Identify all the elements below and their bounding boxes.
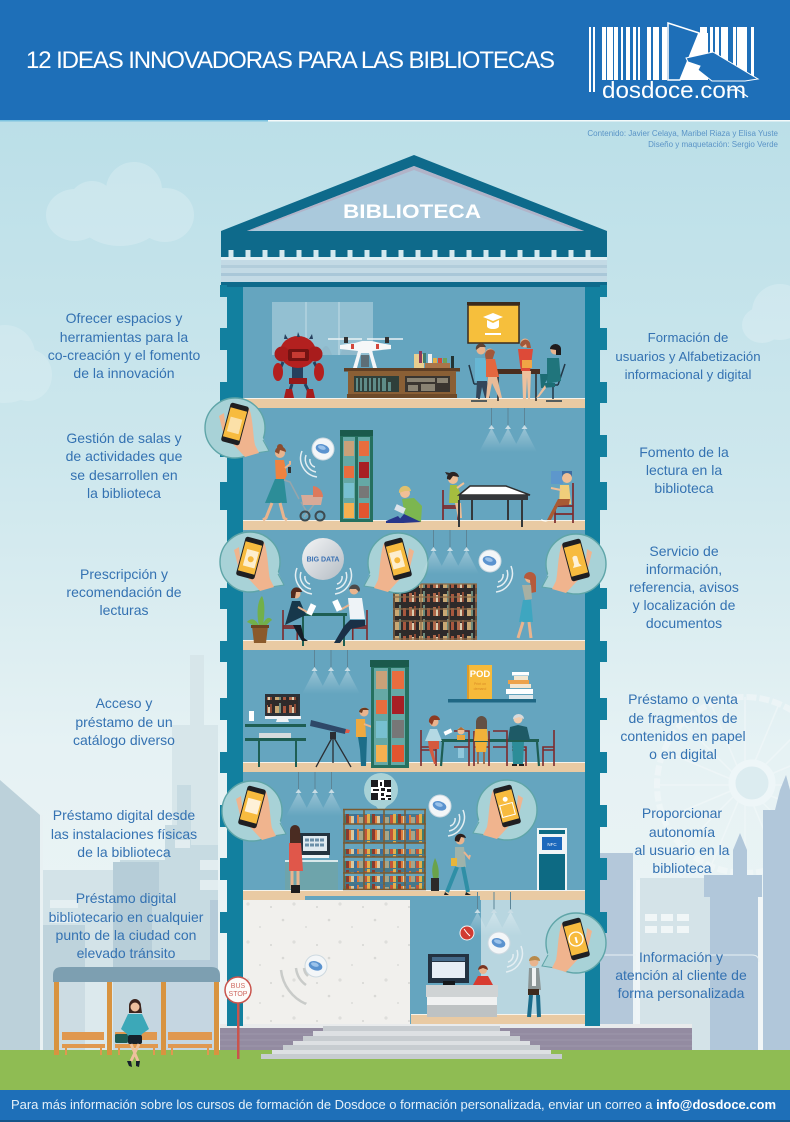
idea: room management: la biblioteca	[87, 485, 161, 501]
floor slabs	[243, 398, 585, 1024]
cloud: upper right	[742, 284, 790, 343]
title: 12 IDEAS INNOVADORAS PARA LAS BIBLIOTECAS	[26, 47, 555, 74]
floor 1: red robot	[273, 332, 324, 398]
floor 3: lamps	[421, 530, 479, 574]
idea: catalogue access: Acceso y	[96, 695, 152, 711]
idea: information service: Servicio de	[649, 543, 719, 559]
idea: fragment lending: de fragmentos de	[629, 710, 738, 726]
floor 4: POD book and stack: Print on	[474, 682, 486, 686]
floor 5: wifi beacon	[429, 795, 464, 836]
idea: personal attention: atención al cliente de	[615, 967, 747, 983]
floor 5: lamps	[286, 772, 344, 816]
bus stop sign: BUS	[231, 983, 246, 990]
ground floor white wall	[243, 900, 410, 1024]
credits	[587, 129, 779, 149]
benches	[62, 1032, 212, 1055]
floor 4: lamps	[302, 650, 360, 694]
credits: Contenido: Javier Celaya, Maribel Riaza y Elisa Yuste	[587, 129, 779, 138]
ground floor: reception desk	[426, 985, 498, 1017]
bus stop sign: STOP	[229, 991, 248, 998]
idea: user autonomy: biblioteca	[652, 860, 712, 876]
idea: information service: información,	[646, 561, 722, 577]
idea: personal attention: forma personalizada	[618, 985, 745, 1001]
floor 5: phone bubble map	[473, 780, 537, 840]
idea: reading recommendation: Prescripción y	[80, 566, 168, 582]
floor 4: computer station	[245, 694, 306, 767]
idea: room management: Gestión de salas y	[66, 430, 182, 446]
idea: catalogue access: préstamo de un	[75, 714, 173, 730]
floor 2: VR reader	[541, 471, 573, 523]
desk-top books	[414, 351, 454, 368]
bus shelter	[53, 967, 220, 1055]
floor 2: tall bookcase	[340, 430, 373, 522]
idea: reading recommendation: lecturas	[99, 602, 149, 618]
cloud: upper left	[46, 162, 194, 246]
idea: user autonomy: autonomía	[649, 824, 715, 840]
interior wall	[243, 287, 585, 1024]
ground floor lobby glass	[481, 900, 585, 1014]
grass	[0, 1050, 790, 1090]
ground floor: man with briefcase	[528, 956, 541, 1017]
idea: co-creation: Ofrecer espacios y	[66, 310, 182, 326]
idea: fragment lending: contenidos en papel	[620, 728, 746, 744]
idea: catalogue access: catálogo diverso	[73, 732, 175, 748]
ground floor: reception monitor	[428, 954, 469, 985]
floor 4: tall bookcase	[370, 660, 409, 768]
idea: co-creation: herramientas para la	[60, 329, 188, 345]
columns	[220, 285, 607, 1026]
idea: digital lending in the city: elevado tránsito	[77, 945, 176, 961]
roof pediment	[221, 155, 607, 232]
idea: reading promotion: lectura en la	[646, 462, 722, 478]
ground floor: receptionist	[473, 965, 493, 985]
floor 4: man at bookcase	[356, 708, 372, 766]
city skyline left	[0, 655, 218, 1055]
floor 2: boy reading on floor	[386, 486, 422, 523]
ground floor: phone bubble info	[542, 913, 606, 973]
entrance steps	[261, 1026, 562, 1059]
floor 3: phone bubble favourite	[364, 533, 428, 593]
big data disk	[302, 538, 344, 580]
floor 2: wifi beacon	[301, 438, 334, 477]
idea: digital lending in the city: Préstamo digital	[76, 890, 176, 906]
logo: dosdoce barcode	[589, 23, 758, 103]
idea: digital lending from library: las instalaciones físicas	[51, 826, 197, 842]
woman waiting at bus stop	[115, 999, 149, 1067]
idea: reading recommendation: recomendación de	[66, 584, 182, 600]
idea: information service: referencia, avisos	[629, 579, 739, 595]
floor 3: phone bubble alert	[542, 534, 606, 594]
floor 5: walking woman	[444, 834, 471, 895]
floor 4: POD book and stack: POD	[470, 669, 490, 680]
floor 3: wifi arcs around big data	[296, 568, 351, 594]
idea: digital lending from library: de la biblioteca	[77, 844, 171, 860]
floor 1: library desk with books	[344, 351, 460, 398]
floor 5: QR code bubble	[364, 773, 398, 813]
idea: room management: de actividades que	[66, 448, 183, 464]
ground floor: clock	[460, 926, 474, 940]
floor 3: plant	[247, 596, 272, 643]
idea: reading promotion: Fomento de la	[639, 444, 729, 460]
idea: co-creation: co-creación y el fomento	[48, 347, 200, 363]
floor 4: reading table with four people	[421, 714, 554, 766]
ground floor: wifi beacon	[488, 932, 522, 972]
idea: information service: documentos	[646, 615, 722, 631]
floor 3: woman with phone	[518, 572, 536, 638]
idea: user training: usuarios y Alfabetización	[615, 349, 761, 364]
idea: fragment lending: o en digital	[649, 746, 717, 762]
logo: dosdoce barcode: dosdoce.com	[602, 77, 746, 103]
floor 3: bookcase dark	[393, 584, 477, 640]
floor 3: phone bubble star	[220, 532, 284, 592]
entablature	[221, 231, 607, 287]
floor 3: wifi beacon	[479, 550, 512, 592]
floor 4: telescope	[310, 720, 351, 767]
floor 2: girl at table	[443, 472, 464, 520]
brick wall base	[220, 1024, 692, 1052]
floor 2: lamps	[479, 408, 537, 452]
floor 5: NFC kiosk: NFC	[547, 842, 557, 847]
idea: user training: Formación de	[648, 330, 728, 345]
idea: digital lending in the city: punto de la ciudad con	[56, 927, 196, 943]
city skyline right with ferris wheel	[600, 697, 790, 1052]
floor 1: meeting group	[469, 338, 565, 401]
idea: personal attention: Información y	[639, 949, 723, 965]
floor 5: self-service desk with woman	[285, 825, 338, 893]
idea: digital lending in the city: bibliotecario en cualquier	[49, 909, 204, 925]
floor 5: bookshelf wall	[343, 809, 426, 890]
floor 2: touch table	[459, 486, 530, 527]
idea: room management: se desarrollen en	[70, 467, 178, 483]
idea: co-creation: de la innovación	[73, 365, 175, 381]
header band	[0, 0, 790, 122]
footer text: Para más información sobre los cursos de formación de Dosdoce o formación personalizada, enviar un correo a info@dosdoce.com	[11, 1097, 776, 1112]
credits: Diseño y maquetación: Sergio Verde	[648, 140, 779, 149]
idea: user training: informacional y digital	[625, 367, 751, 382]
floor 4: POD book and stack: demand	[474, 687, 486, 691]
floor 4: POD book and stack	[448, 665, 536, 702]
ground floor: wall wifi	[281, 955, 327, 1004]
floor 3: woman and man at table	[283, 585, 367, 646]
footer band	[0, 1090, 790, 1122]
idea: information service: y localización de	[633, 597, 736, 613]
idea: digital lending from library: Préstamo digital desde	[53, 807, 195, 823]
building	[220, 155, 607, 1026]
idea: reading promotion: biblioteca	[654, 480, 714, 496]
idea: fragment lending: Préstamo o venta	[628, 691, 738, 707]
bus stop sign	[225, 977, 251, 1059]
floor 5: phone bubble document	[222, 781, 286, 841]
floor 1: drone	[328, 337, 403, 368]
floor 2: woman with stroller	[263, 444, 324, 520]
roof label: BIBLIOTECA	[343, 202, 481, 223]
big data disk: BIG DATA	[307, 556, 339, 564]
ground floor: lamps	[465, 892, 523, 936]
floor 1: window	[272, 302, 373, 355]
floor 5: NFC kiosk	[537, 828, 567, 891]
floor 1: projection screen	[467, 302, 520, 343]
floor 5: plant	[431, 858, 439, 891]
cloud: mid left	[0, 325, 52, 403]
idea: user autonomy: Proporcionar	[642, 805, 722, 821]
floor 2: phone bubble calendar	[205, 398, 269, 458]
idea: user autonomy: al usuario en la	[635, 842, 730, 858]
